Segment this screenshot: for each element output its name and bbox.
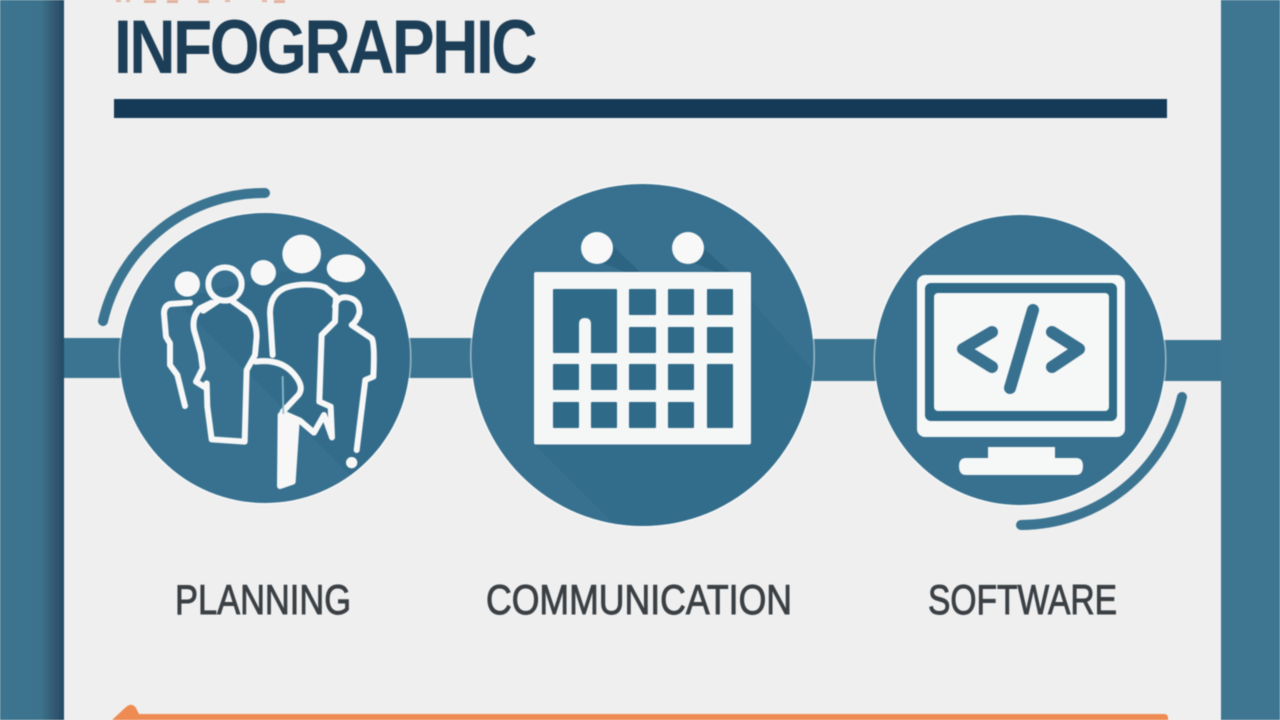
calendar rings — [581, 232, 704, 264]
calendar day cells — [553, 289, 733, 428]
label: software: SOFTWARE — [928, 576, 1117, 623]
monitor frame — [917, 275, 1125, 437]
panel: communication circle — [470, 182, 830, 530]
arc: software accent — [1021, 397, 1182, 525]
code symbol — [963, 310, 1079, 388]
title: INFOGRAPHIC — [114, 5, 536, 90]
cropped orange line at top edge, illegible in the reference — [116, 0, 285, 3]
icon: monitor with code — [917, 275, 1125, 475]
label: communication: COMMUNICATION — [486, 576, 792, 623]
panel: planning circle — [97, 187, 412, 504]
right side band — [1221, 0, 1280, 720]
label: planning: PLANNING — [175, 576, 351, 623]
orange bar with arrow tip — [112, 705, 1168, 720]
connector line between circles — [64, 338, 1221, 381]
icon: group of people — [164, 235, 374, 486]
panel: software circle — [874, 214, 1182, 525]
calendar body — [534, 272, 751, 444]
left side band — [0, 0, 64, 720]
arc: planning accent — [103, 193, 265, 321]
icon: calendar — [534, 232, 751, 444]
title rule — [114, 99, 1167, 118]
monitor screen — [934, 293, 1109, 411]
monitor stand — [959, 447, 1083, 475]
